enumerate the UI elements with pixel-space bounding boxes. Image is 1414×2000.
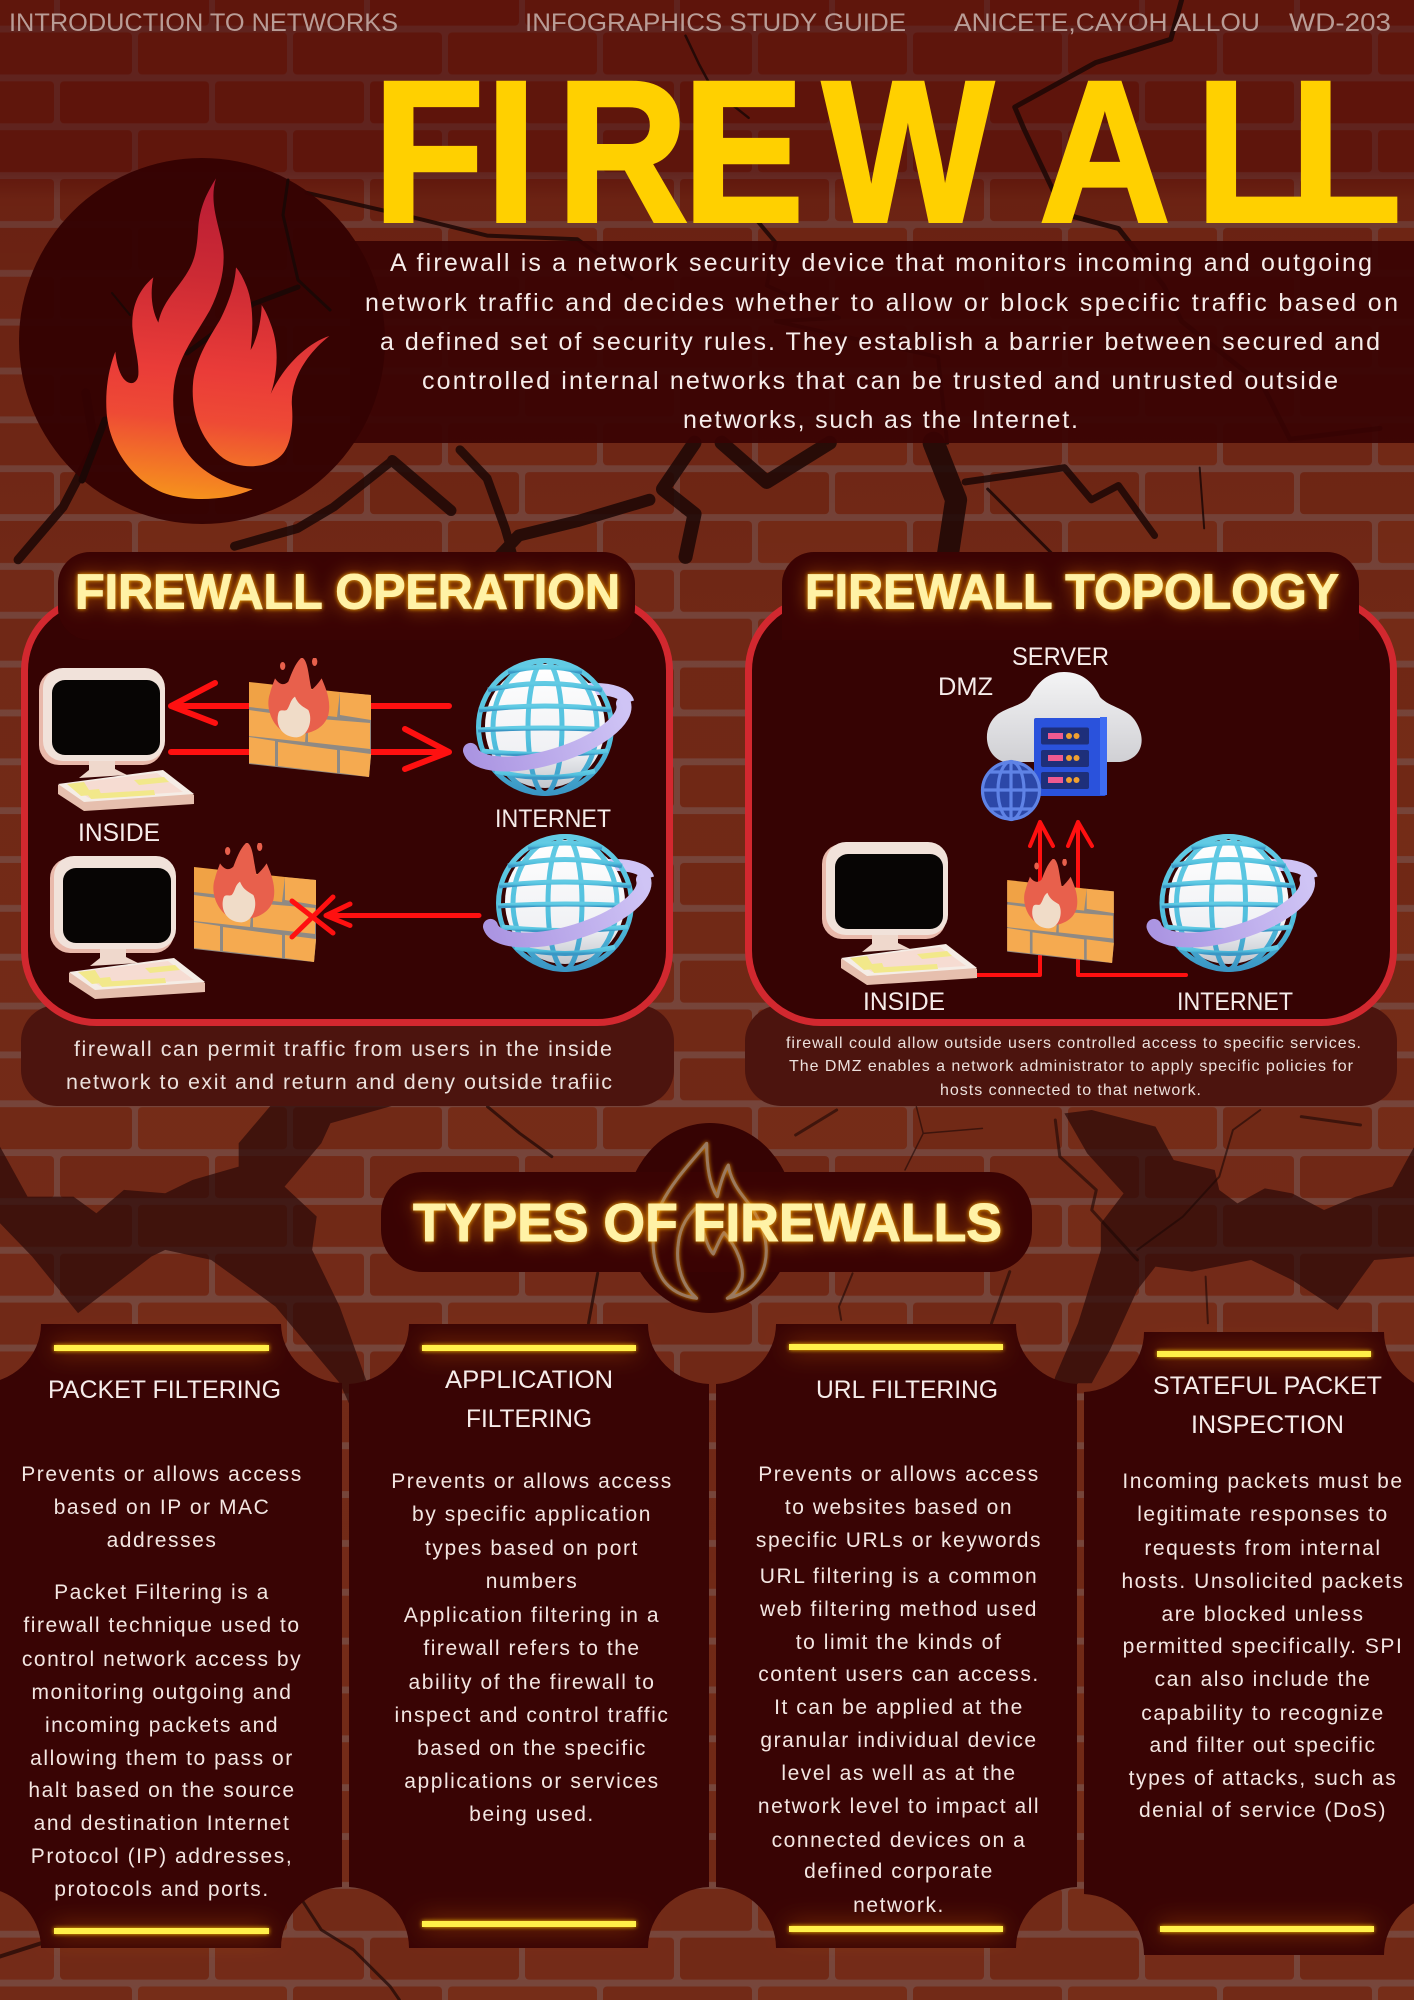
caption: operation: network to exit and return and deny outside trafiic <box>66 1070 612 1094</box>
description text <box>365 249 1398 434</box>
card body: It can be applied at the <box>774 1696 1024 1719</box>
label: inside: INSIDE <box>863 988 945 1016</box>
icon: firewall wall <box>1007 858 1114 963</box>
card body: network level to impact all <box>758 1795 1040 1818</box>
icon: internet globe <box>1154 836 1316 970</box>
heading: firewall topology: FIREWALL TOPOLOGY <box>805 566 1339 620</box>
description text: network traffic and decides whether to allow or block specific traffic based on <box>365 289 1398 317</box>
label: internet: INTERNET <box>495 805 611 833</box>
glow bar top <box>1157 1351 1371 1357</box>
card body: connected devices on a <box>772 1829 1026 1852</box>
card body: denial of service (DoS) <box>1139 1799 1387 1822</box>
glow bar top <box>54 1345 269 1351</box>
panel: stateful packet inspection <box>1084 1332 1414 1955</box>
glow bar bottom <box>1160 1926 1374 1932</box>
icon: small blue globe <box>981 760 1041 820</box>
glow bar bottom <box>54 1928 269 1934</box>
card body: based on the specific <box>417 1737 647 1760</box>
arrows: allowed traffic <box>171 683 449 769</box>
card body: Incoming packets must be <box>1122 1470 1404 1493</box>
description text: networks, such as the Internet. <box>683 406 1078 434</box>
card body: based on IP or MAC <box>54 1496 270 1519</box>
card body: permitted specifically. SPI <box>1123 1635 1403 1658</box>
card body: incoming packets and <box>45 1714 279 1737</box>
card body: and destination Internet <box>34 1812 290 1835</box>
header: course, guide and author line: INFOGRAPHICS STUDY GUIDE <box>525 9 906 37</box>
arrow: denied traffic with cross <box>292 897 479 937</box>
card body: control network access by <box>22 1648 302 1671</box>
card body: addresses <box>107 1529 217 1552</box>
description text: a defined set of security rules. They establish a barrier between secured and <box>380 328 1380 356</box>
icon: firewall wall <box>249 657 371 777</box>
card body: halt based on the source <box>28 1779 296 1802</box>
header: course, guide and author line: ANICETE,CAYOH ALLOU <box>954 9 1260 37</box>
label: inside: INSIDE <box>78 819 160 847</box>
card title: URL FILTERING <box>816 1376 998 1404</box>
glow bar top <box>422 1345 636 1351</box>
icon: internet globe <box>470 660 632 794</box>
card body: can also include the <box>1155 1668 1371 1691</box>
panel: firewall operation <box>21 552 674 1106</box>
label: internet: INTERNET <box>1177 988 1293 1016</box>
card body: applications or services <box>404 1770 660 1793</box>
card body: level as well as at the <box>781 1762 1017 1785</box>
icon: cloud server <box>987 672 1142 796</box>
card body: by specific application <box>412 1503 652 1526</box>
card body: allowing them to pass or <box>30 1747 294 1770</box>
caption: operation <box>21 1005 674 1106</box>
card title: PACKET FILTERING <box>48 1376 281 1404</box>
card body: Protocol (IP) addresses, <box>31 1845 293 1868</box>
card body: Prevents or allows access <box>758 1463 1040 1486</box>
card title: APPLICATION <box>445 1366 613 1394</box>
card body: defined corporate <box>804 1860 994 1883</box>
card body: and filter out specific <box>1149 1734 1377 1757</box>
arrows: traffic to DMZ and connections <box>977 822 1186 975</box>
card title <box>445 1366 613 1433</box>
card body: web filtering method used <box>759 1598 1038 1621</box>
card body: types based on port <box>425 1537 639 1560</box>
intro band <box>350 241 1414 443</box>
card body: monitoring outgoing and <box>32 1681 292 1704</box>
title: FIREWALL <box>374 39 1401 264</box>
caption: operation: firewall can permit traffic from users in the inside <box>74 1037 612 1061</box>
panel: application filtering <box>349 1324 709 1948</box>
card body: types of attacks, such as <box>1129 1767 1397 1790</box>
heading: firewall topology <box>782 552 1359 640</box>
card body: to limit the kinds of <box>796 1631 1002 1654</box>
description text: A firewall is a network security device that monitors incoming and outgoing <box>390 249 1372 277</box>
card title <box>1153 1372 1382 1439</box>
card body: to websites based on <box>785 1496 1013 1519</box>
card body <box>756 1463 1042 1917</box>
caption: topology: firewall could allow outside users controlled access to specific services. <box>786 1035 1361 1052</box>
caption: topology: The DMZ enables a network administrator to apply specific policies for <box>789 1058 1354 1075</box>
card body: specific URLs or keywords <box>756 1529 1042 1552</box>
card title: FILTERING <box>466 1405 592 1433</box>
icon: firewall wall blocked row <box>194 842 316 962</box>
icon: internet globe blocked row <box>490 836 652 970</box>
card body <box>21 1463 303 1901</box>
card body <box>1121 1470 1405 1822</box>
card body: firewall technique used to <box>23 1614 301 1637</box>
icon: flame emblem in circle <box>19 158 385 524</box>
heading text: TYPES OF FIREWALLS <box>413 1194 1002 1253</box>
card body: content users can access. <box>758 1663 1040 1686</box>
header: course, guide and author line: INTRODUCTION TO NETWORKS <box>9 9 398 37</box>
card body: legitimate responses to <box>1137 1503 1389 1526</box>
header: course, guide and author line <box>9 9 1391 37</box>
heading: firewall operation: FIREWALL OPERATION <box>75 566 620 620</box>
header: course, guide and author line: WD-203 <box>1289 9 1391 37</box>
card body: being used. <box>469 1803 595 1826</box>
card body: Prevents or allows access <box>21 1463 303 1486</box>
card body: Prevents or allows access <box>391 1470 673 1493</box>
card body <box>391 1470 673 1826</box>
heading: firewall operation <box>58 552 635 640</box>
card body: protocols and ports. <box>54 1878 270 1901</box>
card body: granular individual device <box>760 1729 1038 1752</box>
panel: packet filtering <box>0 1324 342 1948</box>
card body: numbers <box>486 1570 578 1593</box>
card body: requests from internal <box>1144 1537 1382 1560</box>
icon: inside computer <box>822 842 977 985</box>
card body: Application filtering in a <box>404 1604 660 1627</box>
card body: URL filtering is a common <box>760 1565 1038 1588</box>
label: dmz: DMZ <box>938 673 993 701</box>
card body: hosts. Unsolicited packets <box>1121 1570 1405 1593</box>
label: server: SERVER <box>1012 643 1109 671</box>
icon: inside computer <box>39 668 194 811</box>
caption: topology: hosts connected to that network. <box>940 1082 1201 1099</box>
glow bar bottom <box>422 1921 636 1927</box>
card body: are blocked unless <box>1161 1603 1365 1626</box>
card body: Packet Filtering is a <box>54 1581 270 1604</box>
icon: inside computer blocked row <box>50 856 205 999</box>
section heading: types of firewalls <box>381 1123 1032 1313</box>
card body: ability of the firewall to <box>409 1671 655 1694</box>
caption: topology <box>745 1005 1397 1106</box>
card body: capability to recognize <box>1141 1702 1385 1725</box>
icon: neon flame outline <box>653 1143 766 1298</box>
card body: network. <box>853 1894 945 1917</box>
card title: STATEFUL PACKET <box>1153 1372 1382 1400</box>
glow bar bottom <box>789 1926 1003 1932</box>
card body: firewall refers to the <box>423 1637 641 1660</box>
card title: INSPECTION <box>1191 1411 1344 1439</box>
description text: controlled internal networks that can be trusted and untrusted outside <box>422 367 1338 395</box>
panel: url filtering <box>716 1324 1077 1948</box>
card body: inspect and control traffic <box>395 1704 669 1727</box>
glow bar top <box>789 1344 1003 1350</box>
panel: firewall topology <box>745 552 1397 1106</box>
